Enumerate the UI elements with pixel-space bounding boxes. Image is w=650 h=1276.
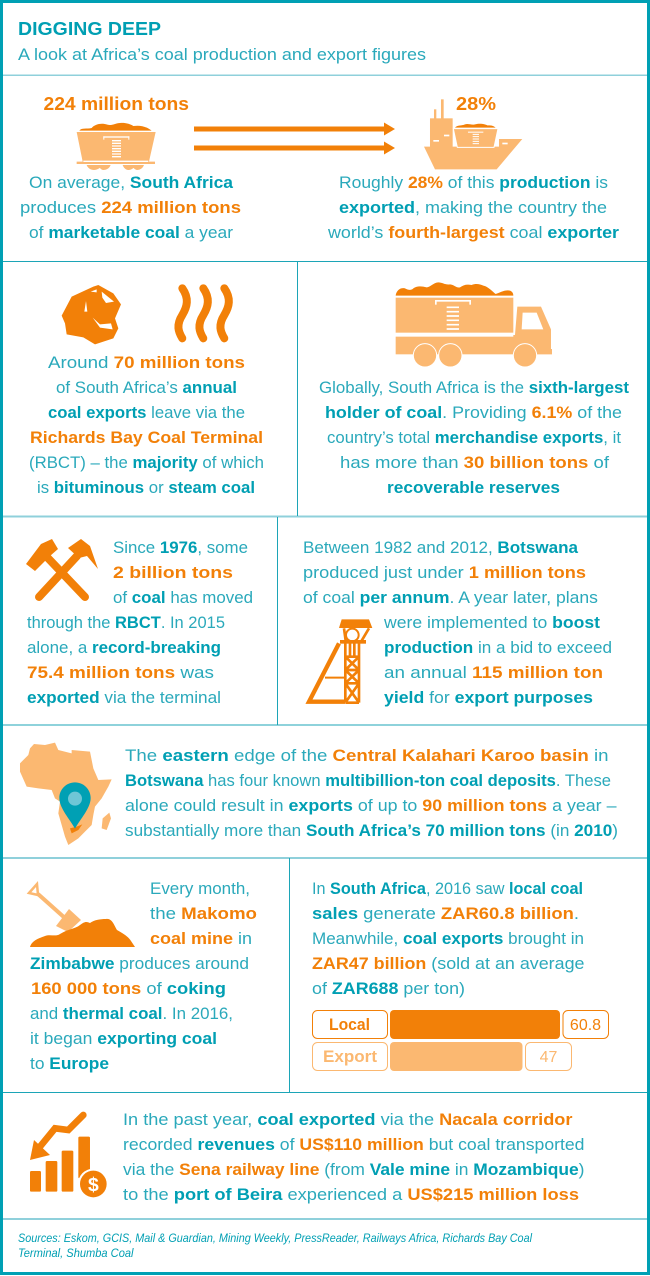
text: Makomo: Zimbabwe produces around xyxy=(30,954,249,973)
text: coal sales: ZAR47 billion (sold at an average xyxy=(312,954,584,973)
panel: Central Kalahari Karoo basin xyxy=(20,743,618,845)
icon: Africa map with pin xyxy=(20,743,112,845)
text: South Africa production: On average, South Africa xyxy=(29,173,234,192)
text: Makomo: it began exporting coal xyxy=(30,1029,217,1048)
panel: coal sales xyxy=(312,879,608,1071)
text: RBCT volumes: through the RBCT. In 2015 xyxy=(27,613,225,632)
text: RBCT volumes: 2 billion tons xyxy=(113,563,233,582)
stat: 224 million tons: 224 million tons xyxy=(44,94,189,114)
sources: Terminal, Shumba Coal xyxy=(18,1246,134,1260)
bar: export xyxy=(312,1042,572,1071)
text: South Africa production xyxy=(20,173,241,242)
text: Makomo: 160 000 tons of coking xyxy=(31,979,226,998)
text: Richards Bay: Richards Bay Coal Terminal xyxy=(30,428,263,447)
text: Makomo: the Makomo xyxy=(150,904,257,923)
subtitle: A look at Africa’s coal production and export figures xyxy=(18,45,426,64)
text: Botswana production: Between 1982 and 2012, Botswana xyxy=(303,538,579,557)
title block xyxy=(18,19,426,64)
text: exported share xyxy=(327,173,619,242)
text: exported share: world’s fourth-largest coal exporter xyxy=(327,223,619,242)
icon: mine headframe xyxy=(309,619,372,703)
text: RBCT volumes xyxy=(27,538,253,707)
text: Botswana production: yield for export purposes xyxy=(384,688,593,707)
icon: shovel and coal heap xyxy=(29,884,135,947)
bar: local: Local xyxy=(329,1015,370,1034)
text: Botswana production: of coal per annum. A year later, plans xyxy=(303,588,598,607)
text: Richards Bay: Around 70 million tons xyxy=(48,353,245,372)
bar chart xyxy=(312,1010,608,1071)
text: global holder: country’s total merchandise exports, it xyxy=(327,428,621,447)
panel: global holder of coal xyxy=(319,282,629,497)
text: Makomo: coal mine in xyxy=(150,929,252,948)
text: global holder: Globally, South Africa is the sixth-largest xyxy=(319,378,629,397)
text: Richards Bay: (RBCT) – the majority of which xyxy=(29,453,264,472)
text: Makomo: to Europe xyxy=(30,1054,109,1073)
text: rail corridors: recorded revenues of US$110 million but coal transported xyxy=(123,1135,584,1154)
text: Richards Bay: of South Africa’s annual xyxy=(56,378,237,397)
text: global holder: holder of coal . Providing 6.1% of the xyxy=(325,403,622,422)
icon: falling revenue chart xyxy=(30,1115,109,1199)
sources xyxy=(18,1231,532,1260)
panel: production and export xyxy=(20,94,619,242)
text: Botswana production: an annual 115 million ton xyxy=(384,663,603,682)
text: exported share: Roughly 28% of this production is xyxy=(339,173,608,192)
text: Botswana production: production in a bid to exceed xyxy=(384,638,612,657)
text: Kalahari basin: The eastern edge of the Central Kalahari Karoo basin in xyxy=(125,746,608,765)
text: RBCT volumes: exported via the terminal xyxy=(27,688,221,707)
text: Richards Bay: is bituminous or steam coal xyxy=(37,478,255,497)
text: Makomo xyxy=(30,879,257,1073)
sources: Sources: Eskom, GCIS, Mail & Guardian, Mining Weekly, PressReader, Railways Africa, Richards Bay Coal xyxy=(18,1231,532,1245)
text: global holder: recoverable reserves xyxy=(387,478,560,497)
icon: crossed hammers xyxy=(26,539,98,597)
text: Botswana production: were implemented to boost xyxy=(383,613,600,632)
text: rail corridors: to the port of Beira experienced a US$215 million loss xyxy=(123,1185,579,1204)
bar: local xyxy=(312,1010,608,1039)
text: Kalahari basin: Botswana has four known multibillion-ton coal deposits. These xyxy=(125,771,611,790)
bar: local: 60.8 xyxy=(570,1017,601,1034)
icon: falling revenue chart: $ xyxy=(88,1175,99,1196)
panel: Richards Bay exports xyxy=(29,285,264,497)
icon: coal wagon xyxy=(77,123,156,170)
text: Botswana production xyxy=(303,538,612,707)
text: Kalahari basin xyxy=(125,746,618,840)
text: Kalahari basin: substantially more than South Africa’s 70 million tons (in 2010) xyxy=(125,821,618,840)
text: coal sales: In South Africa, 2016 saw local coal xyxy=(312,879,583,898)
text: Makomo: Every month, xyxy=(150,879,250,898)
stat: 28%: 28% xyxy=(456,94,496,114)
text: South Africa production: of marketable coal a year xyxy=(29,223,233,242)
text: exported share: exported, making the country the xyxy=(339,198,607,217)
text: Kalahari basin: alone could result in exports of up to 90 million tons a year – xyxy=(125,796,617,815)
arrow: upper xyxy=(194,122,395,136)
icon: coal truck xyxy=(396,282,552,367)
text: global holder xyxy=(319,378,629,497)
text: Richards Bay: coal exports leave via the xyxy=(48,403,245,422)
text: Botswana production: produced just under 1 million tons xyxy=(303,563,586,582)
panel: Makomo coal mine xyxy=(29,879,257,1073)
panel: RBCT volumes xyxy=(26,538,253,707)
text: coal sales xyxy=(312,879,584,998)
text: Richards Bay xyxy=(29,353,264,497)
text: coal sales: Meanwhile, coal exports brought in xyxy=(312,929,584,948)
bar: export: Export xyxy=(323,1047,377,1066)
title: DIGGING DEEP xyxy=(18,19,161,39)
bar: export: 47 xyxy=(540,1049,558,1066)
text: rail corridors: via the Sena railway line (from Vale mine in Mozambique) xyxy=(123,1160,584,1179)
arrow: lower xyxy=(194,142,395,154)
icon: lump of coal xyxy=(62,285,121,344)
icon: cargo ship xyxy=(424,99,522,169)
text: RBCT volumes: alone, a record-breaking xyxy=(27,638,221,657)
text: South Africa production: produces 224 million tons xyxy=(20,198,241,217)
panel: Botswana production xyxy=(303,538,612,707)
text: global holder: has more than 30 billion tons of xyxy=(340,453,609,472)
text: RBCT volumes: of coal has moved xyxy=(113,588,253,607)
text: Makomo: and thermal coal. In 2016, xyxy=(30,1004,233,1023)
text: rail corridors xyxy=(123,1110,584,1204)
text: rail corridors: In the past year, coal exported via the Nacala corridor xyxy=(123,1110,573,1129)
text: coal sales: of ZAR688 per ton) xyxy=(312,979,465,998)
icon: steam waves xyxy=(178,288,229,338)
text: RBCT volumes: 75.4 million tons was xyxy=(27,663,214,682)
text: coal sales: sales generate ZAR60.8 billion . xyxy=(312,904,579,923)
panel: rail corridors xyxy=(30,1110,584,1204)
text: RBCT volumes: Since 1976, some xyxy=(113,538,248,557)
